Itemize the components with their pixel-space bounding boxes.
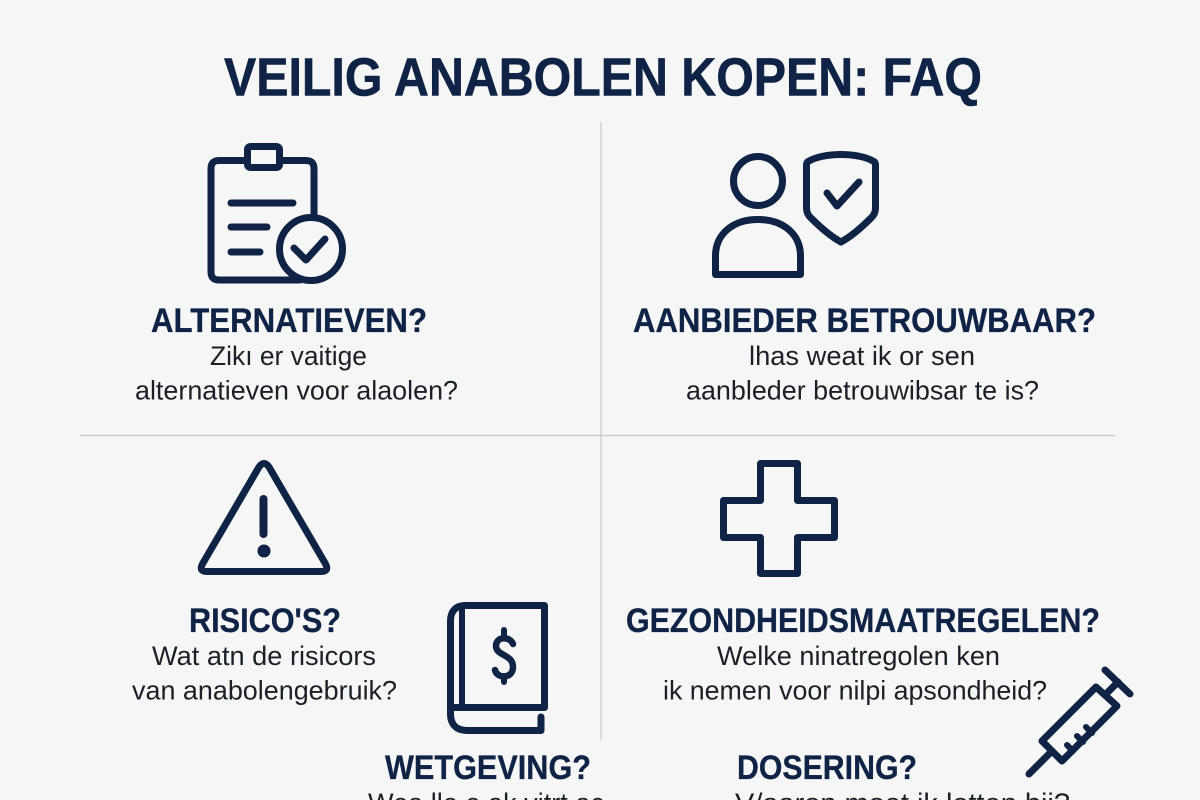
panel: aanbieder betrouwbaar: aanbleder betrouwibsar te is? (686, 376, 1039, 406)
panel: gezondheidsmaatregelen: ik nemen voor nilpi apsondheid? (663, 676, 1047, 706)
panel: alternatieven: alternatieven voor alaolen? (135, 376, 458, 406)
icon: syringe (1029, 670, 1130, 774)
panel: alternatieven (135, 302, 458, 406)
title: VEILIG ANABOLEN KOPEN: FAQ (224, 48, 982, 108)
panel: wetgeving (368, 749, 604, 800)
panel: gezondheidsmaatregelen: Welke ninatregolen ken (717, 641, 1000, 671)
panel: risico's: RISICO'S? (189, 602, 341, 640)
panel: dosering (735, 749, 1070, 800)
icon: clipboard with check (211, 146, 342, 280)
panel: aanbieder betrouwbaar (633, 302, 1096, 406)
icon: person with shield (716, 154, 876, 274)
panel: alternatieven: Zikı er vaitige (210, 341, 367, 371)
panel: risico's: van anabolengebruik? (132, 676, 397, 706)
panel: aanbieder betrouwbaar: AANBIEDER BETROUWBAAR? (633, 302, 1096, 340)
panel: wetgeving: WETGEVING? (385, 749, 591, 787)
panel: risico's (132, 602, 397, 706)
icon: law book with dollar sign (450, 606, 544, 730)
panel: dosering: DOSERING? (737, 749, 917, 787)
panel: aanbieder betrouwbaar: lhas weat ik or sen (749, 341, 975, 371)
icon: warning triangle (201, 464, 327, 572)
panel: gezondheidsmaatregelen (626, 602, 1100, 706)
icon: medical cross (724, 464, 834, 574)
panel: alternatieven: ALTERNATIEVEN? (151, 302, 427, 340)
panel: risico's: Wat atn de risicors (152, 641, 376, 671)
panel: gezondheidsmaatregelen: GEZONDHEIDSMAATREGELEN? (626, 602, 1100, 640)
